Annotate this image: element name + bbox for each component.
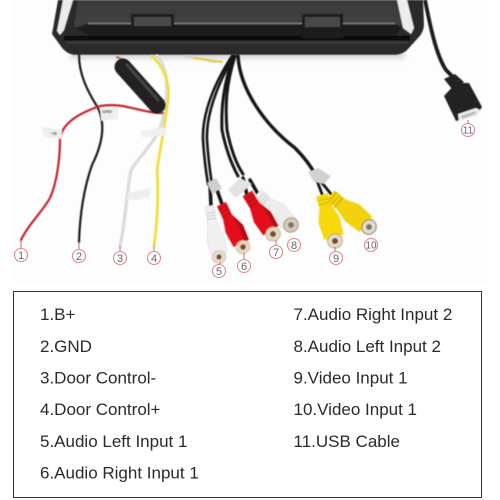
- callout 5: [212, 264, 226, 278]
- callout 11: 11: [463, 126, 474, 137]
- callout 1: [14, 248, 28, 262]
- callout 11: [462, 124, 474, 137]
- callout 7: [270, 246, 282, 259]
- RCA plugs: [202, 168, 381, 265]
- wire labels: GND: [102, 109, 113, 114]
- legend panel: [14, 292, 482, 498]
- callout 6: [238, 260, 250, 273]
- callout 2: 2: [76, 251, 82, 263]
- legend left column: 2.GND: [40, 337, 92, 356]
- legend left column: 4.Door Control+: [40, 400, 161, 419]
- plug 5 white: [202, 204, 228, 265]
- hinge left: [131, 14, 174, 34]
- wire labels: [42, 107, 165, 200]
- legend right column: 7.Audio Right Input 2: [294, 305, 452, 324]
- wire: yellow: [152, 56, 168, 246]
- hinge right: [302, 14, 343, 38]
- callout 8: [288, 238, 300, 252]
- callout numbers: [14, 120, 474, 278]
- legend left column: 1.B+: [40, 305, 76, 324]
- white side strips: [57, 0, 73, 35]
- legend right column: 10.Video Input 1: [294, 400, 417, 419]
- callout 5: 5: [216, 266, 222, 278]
- callout 8: 8: [291, 240, 297, 252]
- callout 9: 9: [333, 253, 339, 265]
- legend left column: [40, 305, 199, 482]
- callout 3: 3: [117, 253, 123, 265]
- callout 2: [72, 250, 86, 263]
- plug 10 yellow: [324, 186, 381, 240]
- callout 4: [148, 252, 160, 265]
- callout 9: [330, 252, 342, 265]
- callout 1: 1: [18, 250, 24, 262]
- cables to RCA plugs: [203, 56, 331, 206]
- screen: [74, 0, 402, 35]
- wire bundle under monitor: [117, 56, 222, 62]
- callout 10: 10: [365, 241, 377, 252]
- legend left column: 5.Audio Left Input 1: [40, 432, 187, 451]
- callout 4: 4: [151, 253, 157, 265]
- plug 9 yellow: [311, 192, 347, 251]
- photo background: [12, 0, 488, 282]
- wire labels: +B: [51, 131, 58, 136]
- legend right column: 11.USB Cable: [294, 432, 400, 451]
- legend right column: 9.Video Input 1: [294, 368, 408, 388]
- wire: red: [21, 105, 163, 240]
- legend left column: 6.Audio Right Input 1: [40, 464, 199, 482]
- legend left column: 3.Door Control-: [40, 368, 156, 388]
- wire: white: [120, 56, 167, 246]
- plug 7 red: [239, 188, 285, 245]
- cable clips: [207, 178, 222, 194]
- wire: black: [79, 55, 102, 242]
- USB cable: [425, 0, 482, 121]
- callout 6: 6: [241, 261, 247, 273]
- callout 3: [114, 252, 126, 265]
- plug 6 red: [214, 200, 254, 257]
- legend right column: 8.Audio Left Input 2: [294, 337, 441, 356]
- callout 7: 7: [273, 247, 279, 259]
- legend right column: [294, 305, 452, 451]
- wires 1 to 4: [21, 55, 168, 246]
- plug 8 white: [251, 186, 303, 237]
- inline fuse holder: [123, 65, 158, 105]
- monitor bottom edge: [52, 0, 424, 59]
